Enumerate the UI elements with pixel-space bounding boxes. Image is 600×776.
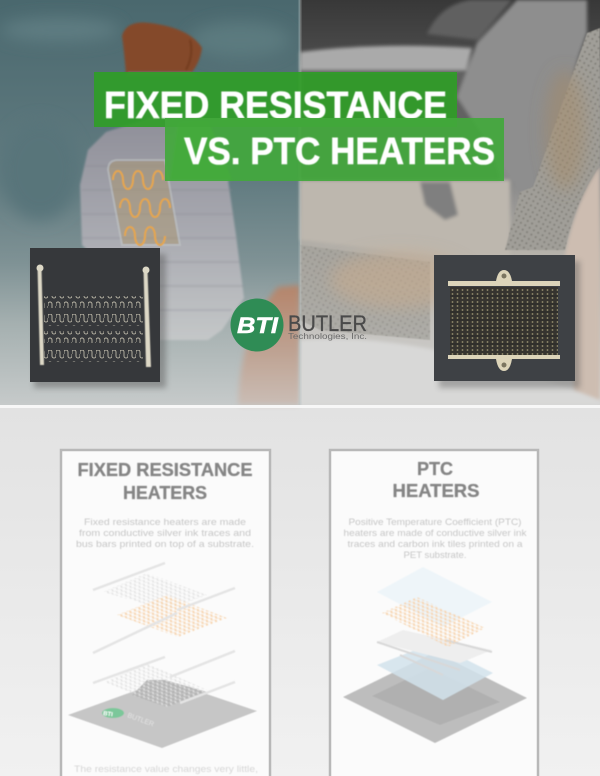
PTC heater sample photo xyxy=(434,255,580,388)
beanie xyxy=(122,23,202,76)
logo: Butler Technologies: BTI xyxy=(237,313,279,338)
heading line 2: HEATERS xyxy=(123,482,207,503)
title line 2: VS. PTC HEATERS xyxy=(184,131,495,173)
intro text: bus bars printed on top of a substrate. xyxy=(76,539,254,550)
heading line 2: HEATERS xyxy=(392,480,480,501)
intro text: heaters are made of conductive silver ink xyxy=(344,528,527,539)
fixed resistance heater sample photo xyxy=(30,248,166,388)
exploded layer diagram xyxy=(343,567,527,743)
logo: Butler Technologies xyxy=(230,298,367,352)
exploded layer diagram: BUTLER xyxy=(126,712,155,728)
centre divider xyxy=(298,0,302,405)
title line 2 xyxy=(165,118,504,181)
logo: Butler Technologies: Technologies, Inc. xyxy=(288,332,367,341)
heading: FIXED RESISTANCE xyxy=(78,459,252,480)
intro text xyxy=(344,517,527,561)
photo panel: person in heated jacket xyxy=(0,0,300,405)
heading: PTC xyxy=(417,458,453,479)
panel: fixed resistance heaters xyxy=(61,450,270,776)
bottom text: The resistance value changes very little, xyxy=(74,764,258,775)
intro text: traces and carbon ink tiles printed on a xyxy=(348,539,523,550)
exploded layer diagram: BTI xyxy=(103,711,113,718)
fog texture xyxy=(0,18,290,220)
photo panel: heated car seat xyxy=(300,0,600,405)
intro text: Positive Temperature Coefficient (PTC) xyxy=(348,517,522,528)
logo: Butler Technologies: BUTLER xyxy=(288,311,367,336)
heater graphic on jacket xyxy=(108,160,180,245)
lower section background xyxy=(0,405,600,776)
jacket xyxy=(80,118,244,340)
intro text: from conductive silver ink traces and xyxy=(79,528,251,539)
panel: PTC heaters xyxy=(330,450,538,776)
title line 1: FIXED RESISTANCE xyxy=(104,85,447,127)
exploded layer diagram xyxy=(68,563,257,748)
title banner xyxy=(94,72,504,181)
seat mesh xyxy=(300,28,600,340)
intro text xyxy=(76,517,254,550)
shrub xyxy=(238,285,300,405)
intro text: PET substrate. xyxy=(404,550,466,561)
white separator xyxy=(0,405,600,408)
intro text: Fixed resistance heaters are made xyxy=(84,517,246,528)
